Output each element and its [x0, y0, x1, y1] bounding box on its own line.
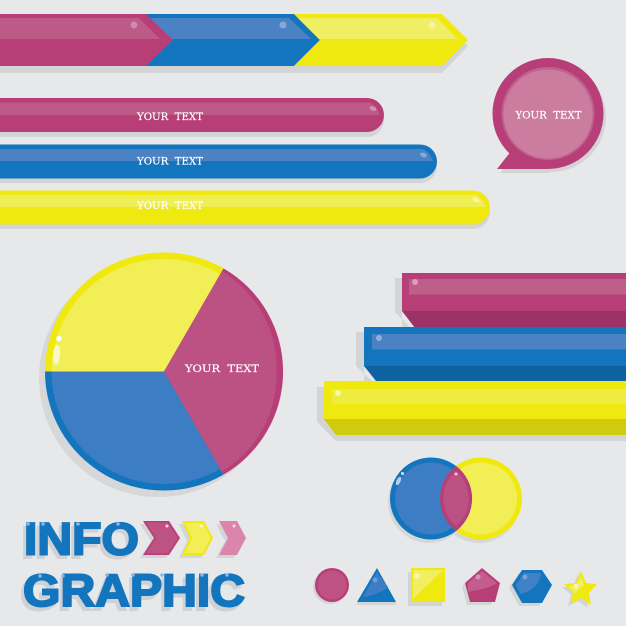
blue 3D bar [356, 327, 626, 381]
yellow text bar [0, 190, 490, 229]
yellow chevron segment [294, 14, 468, 66]
yellow text bar: YOUR TEXT [136, 200, 203, 212]
small chevron: magenta [140, 521, 180, 558]
title: INFO GRAPHIC [20, 514, 245, 620]
venn diagram [388, 458, 522, 543]
small chevron: yellow [179, 521, 213, 558]
icon: pie gloss [52, 336, 62, 365]
magenta chevron segment [0, 14, 173, 66]
yellow 3D bar [317, 381, 626, 441]
magenta 3D bar [395, 273, 626, 328]
pie slice: blue [45, 372, 223, 491]
magenta text bar: YOUR TEXT [136, 111, 203, 123]
venn overlap [440, 466, 472, 531]
icon: hexagon [509, 570, 552, 606]
title gloss dots [26, 522, 229, 578]
icon: venn gloss [395, 472, 404, 486]
pie slice: yellow [45, 252, 223, 372]
panel: stepped 3D bars [317, 273, 626, 441]
pie chart [39, 252, 283, 497]
icon: pentagon [462, 568, 500, 605]
title: INFO GRAPHIC: GRAPHIC [23, 565, 245, 616]
title: INFO GRAPHIC: INFO [24, 514, 139, 564]
venn circle: yellow [440, 458, 522, 540]
blue chevron segment [140, 14, 320, 66]
blue text bar: YOUR TEXT [136, 156, 203, 168]
blue text bar [0, 144, 437, 183]
magenta text bar [0, 98, 384, 137]
pie chart: YOUR TEXT [184, 363, 259, 375]
speech bubble: YOUR TEXT [515, 110, 582, 122]
title: INFO GRAPHIC: INFO [21, 517, 136, 568]
icon: star [562, 571, 597, 608]
pie slice: magenta [164, 268, 283, 475]
panel: chevron arrow banner [0, 14, 468, 73]
speech bubble [492, 58, 606, 173]
icon: triangle [357, 568, 396, 605]
title: INFO GRAPHIC: GRAPHIC [20, 569, 242, 620]
venn circle: blue [390, 458, 472, 540]
icon: square [408, 568, 445, 606]
small chevron: pink [216, 521, 246, 558]
icon: circle [313, 568, 349, 604]
